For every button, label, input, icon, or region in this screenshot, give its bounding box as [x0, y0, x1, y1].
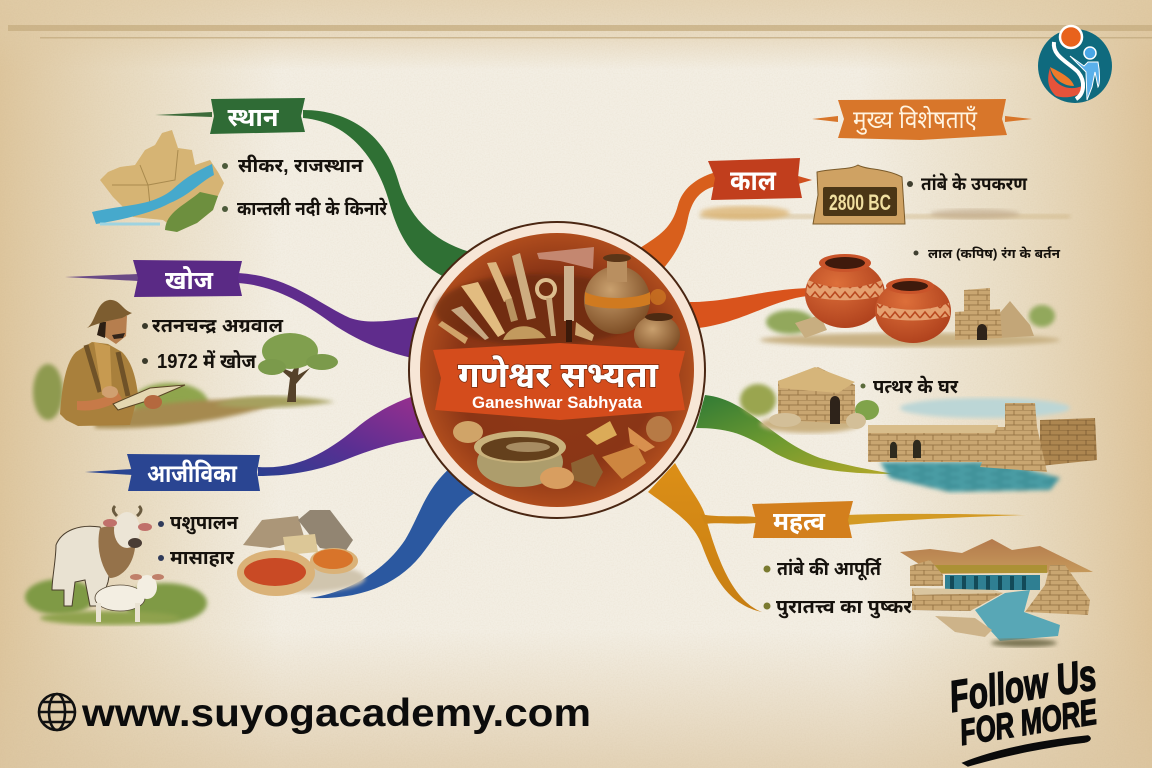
cow — [52, 526, 112, 606]
ribbon: green — [303, 110, 470, 278]
bullets: livelihood: मासाहार — [170, 548, 235, 569]
illustration: red pots and ruins — [760, 254, 1060, 347]
ribbon: amber — [648, 463, 762, 612]
bullets: location — [222, 155, 388, 220]
emblem disk — [420, 233, 694, 507]
ribbon: amber tail — [846, 514, 1026, 525]
bullets: livelihood — [158, 513, 238, 569]
emblem ring — [409, 222, 705, 518]
website URL: www.suyogacademy.com — [81, 692, 591, 735]
bowl and stone finds — [453, 416, 672, 489]
bullets: location: सीकर, राजस्थान — [238, 155, 363, 177]
icon: globe — [39, 694, 75, 730]
bullets: livelihood: पशुपालन — [170, 513, 238, 535]
illustration: mountains and canal — [900, 539, 1093, 647]
banner: आजीविका — [85, 454, 260, 491]
bullets: importance: पुरातत्त्व का पुष्कर — [776, 597, 913, 619]
bullets: importance: तांबे की आपूर्ति — [777, 557, 882, 581]
banner: स्थान — [155, 98, 305, 134]
bullet: stone houses: पत्थर के घर — [873, 375, 959, 398]
ribbon: green to stone houses — [696, 395, 895, 474]
logo — [1038, 26, 1112, 103]
bush and ground — [33, 364, 63, 420]
banner: मुख्य विशेषताएँ: मुख्य विशेषताएँ — [853, 104, 978, 135]
follow us lettering: FOR MORE — [957, 691, 1100, 753]
calf — [95, 585, 145, 611]
illustration: tree — [215, 333, 338, 408]
banner: काल: काल — [730, 165, 777, 196]
bullet: copper tools: तांबे के उपकरण — [921, 174, 1027, 194]
banner: खोज — [65, 260, 242, 297]
bullet: red ware: लाल (कपिष) रंग के बर्तन — [928, 246, 1061, 261]
ribbon: orange to pots — [690, 288, 808, 329]
banner: आजीविका: आजीविका — [147, 459, 238, 488]
illustration: dam and reservoir — [868, 398, 1097, 492]
branch ribbons — [238, 110, 1026, 612]
grass — [25, 579, 95, 615]
date label: 2800 BC — [829, 190, 891, 215]
bullets: discovery: 1972 में खोज — [157, 349, 257, 373]
ribbon: orange to kaal — [640, 172, 716, 270]
website footer — [39, 692, 591, 735]
figure — [60, 342, 138, 426]
clay pots — [584, 254, 680, 355]
follow us lettering — [946, 650, 1100, 766]
banner: महत्व — [752, 501, 853, 538]
copper tools — [435, 247, 645, 346]
illustration: 2800 BC stone — [700, 165, 1070, 224]
title Hindi: गणेश्वर सभ्यता — [458, 355, 659, 395]
bullets: importance — [764, 557, 913, 619]
banner: काल — [708, 158, 812, 200]
illustration: Rajasthan map — [92, 130, 224, 232]
bullets: location: कान्तली नदी के किनारे — [237, 197, 388, 220]
banner: महत्व: महत्व — [773, 506, 826, 536]
title ribbon — [433, 343, 685, 420]
ribbon: amber branch — [700, 514, 756, 524]
ribbon: purple — [238, 273, 418, 358]
illustration: rocks and ochre powder — [237, 510, 365, 596]
ribbon: indigo to magenta — [258, 396, 424, 476]
bullets: discovery: रतनचन्द्र अग्रवाल — [152, 316, 284, 337]
bullets: discovery — [142, 316, 284, 373]
banner: स्थान: स्थान — [228, 102, 279, 132]
illustration: stone house — [740, 367, 879, 433]
ribbon: blue — [310, 468, 475, 598]
banner: खोज: खोज — [165, 265, 214, 295]
banner: मुख्य विशेषताएँ — [812, 99, 1032, 140]
title English: Ganeshwar Sabhyata — [472, 393, 643, 412]
illustration: archaeologist with notebook — [33, 300, 280, 428]
central circle emblem — [409, 222, 705, 518]
illustration: cow and calf — [25, 506, 207, 625]
